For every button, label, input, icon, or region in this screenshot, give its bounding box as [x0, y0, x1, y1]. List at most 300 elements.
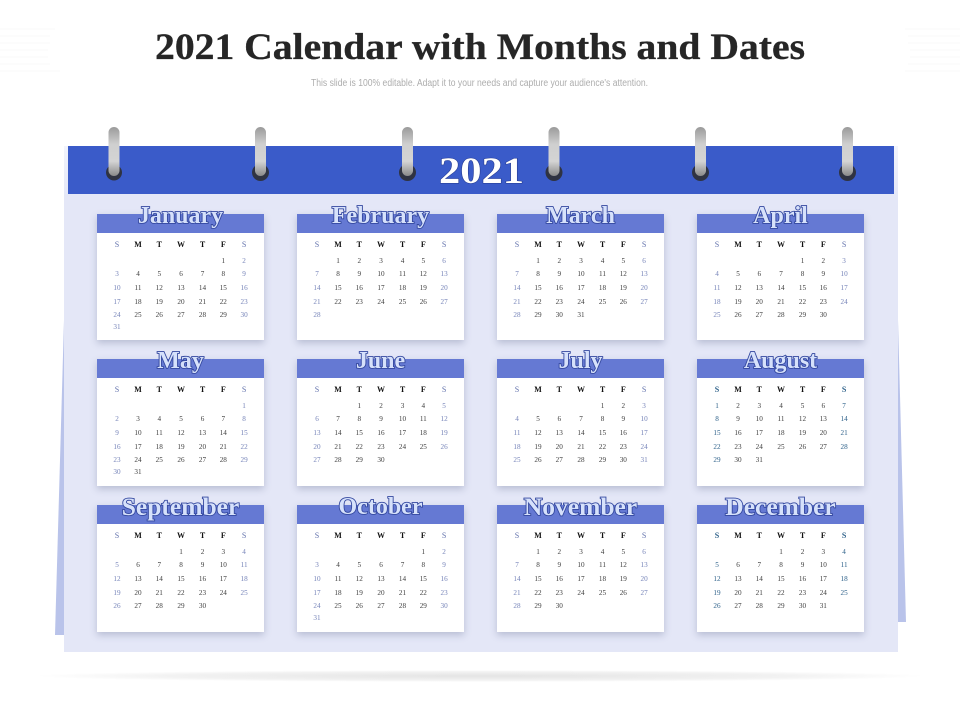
- month card: September: 17: [220, 575, 227, 583]
- month card: February: 5: [422, 257, 425, 265]
- month card: December: W: [777, 531, 785, 540]
- month card: December: 26: [713, 602, 721, 610]
- month card: December: 2: [801, 548, 804, 556]
- month card: April: 5: [736, 270, 740, 278]
- month card: June: 23: [377, 443, 385, 451]
- month card: March: 14: [513, 284, 521, 292]
- month card: July: M: [534, 385, 542, 394]
- month card: May: W: [177, 385, 185, 394]
- month card: March: S: [515, 240, 519, 249]
- month card: September: 16: [199, 575, 206, 583]
- month card: March: 28: [513, 311, 521, 319]
- month card: August: 5: [801, 402, 804, 410]
- month card: June: 16: [377, 429, 385, 437]
- month card: September: 3: [222, 548, 225, 556]
- month card: March: F: [621, 240, 626, 249]
- month card: January: T: [157, 240, 162, 249]
- month card: September: 24: [220, 589, 227, 597]
- month card: September: 13: [134, 575, 142, 583]
- month card: June: 25: [420, 443, 427, 451]
- month card: May: 17: [134, 443, 142, 451]
- month card: June: [297, 359, 464, 486]
- month card: September: 21: [156, 589, 163, 597]
- month card: February: 25: [399, 298, 406, 306]
- month card: March: 6: [642, 257, 646, 265]
- month card: January: 27: [177, 311, 185, 319]
- month card: February: 8: [336, 270, 340, 278]
- month card: February: 20: [440, 284, 448, 292]
- month card: March: S: [642, 240, 646, 249]
- month card: May: 26: [177, 456, 185, 464]
- month card: June: 12: [440, 415, 448, 423]
- month card: May: 13: [199, 429, 206, 437]
- month card: July: 7: [579, 415, 583, 423]
- month card: December: 7: [757, 561, 761, 569]
- month card: February: [297, 214, 464, 340]
- month card: April: 14: [777, 284, 785, 292]
- month card: November: S: [642, 531, 646, 540]
- month card: June: 11: [420, 415, 427, 423]
- month card: March: 25: [599, 298, 606, 306]
- month card: February: 7: [315, 270, 319, 278]
- month card: May: 22: [240, 443, 248, 451]
- month card: June: M: [334, 385, 342, 394]
- month card: October: 29: [420, 602, 427, 610]
- month card: November: M: [534, 531, 542, 540]
- month card: December: 29: [777, 602, 785, 610]
- month card: April: 12: [734, 284, 742, 292]
- month card: November: 27: [640, 589, 648, 597]
- month card: February: 26: [420, 298, 427, 306]
- month card: April: 11: [714, 284, 720, 292]
- month card: January: F: [221, 240, 226, 249]
- month card: April: 9: [822, 270, 825, 278]
- month card: August: S: [715, 385, 719, 394]
- month card: March: 30: [556, 311, 563, 319]
- month card: May: 28: [220, 456, 227, 464]
- month card: December: 4: [842, 548, 846, 556]
- month card: September: 1: [179, 548, 183, 556]
- month card: November: 20: [640, 575, 648, 583]
- month card: September: S: [242, 531, 246, 540]
- month card: December: 25: [840, 589, 848, 597]
- month card: April: 20: [756, 298, 763, 306]
- month card: May: 29: [240, 456, 248, 464]
- month card: August: 10: [756, 415, 763, 423]
- month card: February: 14: [313, 284, 321, 292]
- month card: September: 7: [157, 561, 161, 569]
- month card: October: October: [339, 494, 422, 520]
- month card: February: 21: [313, 298, 321, 306]
- month card: July: 8: [601, 415, 604, 423]
- month card: June: 6: [315, 415, 319, 423]
- month card: October: 1: [422, 548, 425, 556]
- month card: April: April: [753, 203, 808, 229]
- month card: November: 29: [534, 602, 542, 610]
- month card: April: [697, 214, 864, 340]
- month card: July: 2: [622, 402, 625, 410]
- month card: March: 15: [534, 284, 542, 292]
- month card: December: T: [800, 531, 805, 540]
- month card: April: 3: [842, 257, 846, 265]
- month card: May: 1: [242, 402, 246, 410]
- month card: March: 17: [577, 284, 585, 292]
- month card: February: 13: [440, 270, 448, 278]
- month card: November: 24: [577, 589, 585, 597]
- month card: July: 1: [601, 402, 604, 410]
- month card: July: 16: [620, 429, 627, 437]
- month card: December: 6: [736, 561, 740, 569]
- month card: November: 1: [536, 548, 540, 556]
- month card: December: 17: [820, 575, 827, 583]
- month card: July: 9: [622, 415, 625, 423]
- month card: May: 7: [222, 415, 225, 423]
- month card: February: 2: [357, 257, 361, 265]
- month card: December: 14: [756, 575, 763, 583]
- month card: January: 14: [199, 284, 206, 292]
- month card: January: 1: [222, 257, 225, 265]
- month card: September: 11: [241, 561, 248, 569]
- month card: July: 24: [640, 443, 648, 451]
- month card: July: 30: [620, 456, 627, 464]
- month card: February: 16: [356, 284, 363, 292]
- month card: April: 10: [840, 270, 848, 278]
- month card: January: 7: [201, 270, 204, 278]
- month card: February: February: [332, 203, 429, 229]
- month card: October: 21: [399, 589, 406, 597]
- month card: October: M: [334, 531, 342, 540]
- month card: January: S: [115, 240, 119, 249]
- month card: November: 28: [513, 602, 521, 610]
- month card: May: T: [200, 385, 205, 394]
- month card: September: M: [134, 531, 142, 540]
- month card: October: 22: [420, 589, 427, 597]
- month card: April: 6: [757, 270, 761, 278]
- month card: August: 21: [840, 429, 848, 437]
- month card: October: 11: [335, 575, 341, 583]
- month card: August: 20: [820, 429, 827, 437]
- month card: June: 3: [401, 402, 404, 410]
- month card: October: S: [315, 531, 319, 540]
- month card: October: 4: [336, 561, 340, 569]
- month card: September: 6: [136, 561, 140, 569]
- month card: February: 3: [379, 257, 383, 265]
- month card: May: 6: [201, 415, 204, 423]
- month card: March: 27: [640, 298, 648, 306]
- month card: February: S: [315, 240, 319, 249]
- month card: September: 15: [177, 575, 185, 583]
- month card: February: 23: [356, 298, 363, 306]
- month card: June: 4: [422, 402, 425, 410]
- month card: January: 4: [136, 270, 140, 278]
- month card: March: 29: [534, 311, 542, 319]
- month card: March: 18: [599, 284, 606, 292]
- month card: August: 25: [777, 443, 785, 451]
- month card: July: 6: [557, 415, 561, 423]
- month card: May: 2: [115, 415, 119, 423]
- month card: December: 20: [734, 589, 742, 597]
- month card: May: 14: [220, 429, 227, 437]
- month card: January: 15: [220, 284, 227, 292]
- month card: October: 27: [377, 602, 385, 610]
- month card: July: F: [621, 385, 626, 394]
- month card: February: 10: [377, 270, 385, 278]
- month card: June: 17: [399, 429, 406, 437]
- month card: November: 18: [599, 575, 606, 583]
- month card: November: 6: [642, 548, 646, 556]
- month card: April: 18: [713, 298, 721, 306]
- month card: August: M: [734, 385, 742, 394]
- month card: August: 9: [736, 415, 740, 423]
- month card: May: F: [221, 385, 226, 394]
- month card: June: 10: [399, 415, 406, 423]
- month card: March: [497, 214, 664, 340]
- month card: April: 27: [756, 311, 763, 319]
- month card: March: 9: [557, 270, 561, 278]
- month card: March: 12: [620, 270, 627, 278]
- month card: May: 10: [134, 429, 142, 437]
- month card: January: 23: [240, 298, 248, 306]
- month card: October: S: [442, 531, 446, 540]
- month card: January: 18: [134, 298, 142, 306]
- month card: June: 19: [440, 429, 448, 437]
- month card: November: S: [515, 531, 519, 540]
- month card: July: 5: [536, 415, 540, 423]
- month card: November: 21: [513, 589, 521, 597]
- month card: April: T: [800, 240, 805, 249]
- month card: April: W: [777, 240, 785, 249]
- month card: January: 11: [135, 284, 141, 292]
- month card: August: 31: [756, 456, 763, 464]
- month card: September: 2: [201, 548, 204, 556]
- month card: June: S: [442, 385, 446, 394]
- month card: August: 24: [756, 443, 763, 451]
- month card: February: 1: [336, 257, 340, 265]
- month card: August: 29: [713, 456, 721, 464]
- month card: January: 31: [113, 323, 121, 331]
- month card: January: 2: [242, 257, 246, 265]
- month card: November: November: [524, 492, 637, 521]
- month card: April: 15: [799, 284, 806, 292]
- month card: December: T: [757, 531, 762, 540]
- month card: May: S: [242, 385, 246, 394]
- month card: July: 26: [534, 456, 542, 464]
- month card: May: 4: [157, 415, 161, 423]
- month card: June: 2: [379, 402, 383, 410]
- month card: June: 14: [334, 429, 342, 437]
- month card: January: 19: [156, 298, 163, 306]
- month card: August: 3: [757, 402, 761, 410]
- month card: March: 1: [536, 257, 540, 265]
- month card: April: S: [842, 240, 846, 249]
- month card: December: S: [715, 531, 719, 540]
- month card: December: 18: [840, 575, 848, 583]
- month card: January: 24: [113, 311, 121, 319]
- month card: September: S: [115, 531, 119, 540]
- month card: September: 30: [199, 602, 206, 610]
- month card: May: 15: [240, 429, 248, 437]
- month card: October: F: [421, 531, 426, 540]
- month card: November: 22: [534, 589, 542, 597]
- month card: April: 13: [756, 284, 763, 292]
- month card: December: December: [725, 492, 836, 521]
- month card: March: T: [600, 240, 605, 249]
- month card: January: 28: [199, 311, 206, 319]
- month card: February: T: [400, 240, 405, 249]
- month card: June: 13: [313, 429, 321, 437]
- month card: May: 27: [199, 456, 206, 464]
- month card: June: 9: [379, 415, 383, 423]
- month card: July: T: [600, 385, 605, 394]
- month card: February: 12: [420, 270, 427, 278]
- month card: June: 29: [356, 456, 363, 464]
- month card: October: 30: [440, 602, 448, 610]
- month card: August: 7: [842, 402, 846, 410]
- month card: November: 8: [536, 561, 540, 569]
- month card: March: 3: [579, 257, 583, 265]
- month card: April: 1: [801, 257, 804, 265]
- month card: November: T: [600, 531, 605, 540]
- month card: November: 9: [557, 561, 561, 569]
- month card: December: 8: [779, 561, 783, 569]
- month card: February: 15: [334, 284, 342, 292]
- month card: September: 28: [156, 602, 163, 610]
- month card: November: 23: [556, 589, 563, 597]
- month card: June: 21: [334, 443, 342, 451]
- month card: June: 18: [420, 429, 427, 437]
- month card: November: 5: [622, 548, 625, 556]
- month card: July: W: [577, 385, 585, 394]
- month card: November: T: [557, 531, 562, 540]
- month card: October: W: [377, 531, 385, 540]
- month card: March: 7: [515, 270, 519, 278]
- month card: April: 17: [840, 284, 848, 292]
- month card: April: M: [734, 240, 742, 249]
- month card: July: 31: [640, 456, 648, 464]
- month card: March: 24: [577, 298, 585, 306]
- month card: February: 24: [377, 298, 385, 306]
- month card: May: 21: [220, 443, 227, 451]
- month card: December: 23: [799, 589, 806, 597]
- month card: June: 7: [336, 415, 340, 423]
- month card: June: W: [377, 385, 385, 394]
- month card: September: W: [177, 531, 185, 540]
- month card: October: 8: [422, 561, 425, 569]
- month card: December: 19: [713, 589, 721, 597]
- month card: January: 21: [199, 298, 206, 306]
- month card: June: 28: [334, 456, 342, 464]
- month card: August: 4: [779, 402, 783, 410]
- month card: March: 2: [557, 257, 561, 265]
- month card: April: S: [715, 240, 719, 249]
- month card: June: 30: [377, 456, 385, 464]
- month card: May: 8: [242, 415, 246, 423]
- month card: February: 17: [377, 284, 385, 292]
- month card: September: September: [122, 492, 239, 521]
- month card: November: F: [621, 531, 626, 540]
- month card: August: F: [821, 385, 826, 394]
- month card: March: 8: [536, 270, 540, 278]
- month card: March: 26: [620, 298, 627, 306]
- month card: March: March: [546, 203, 615, 229]
- month card: August: 1: [715, 402, 719, 410]
- month card: June: June: [356, 348, 405, 374]
- month card: July: 25: [513, 456, 521, 464]
- month card: May: 24: [134, 456, 142, 464]
- month card: April: 4: [715, 270, 719, 278]
- month card: August: 17: [756, 429, 763, 437]
- month card: December: 11: [841, 561, 848, 569]
- month card: November: 19: [620, 575, 627, 583]
- month card: August: 12: [799, 415, 806, 423]
- month card: May: 23: [113, 456, 121, 464]
- month card: May: [97, 359, 264, 486]
- month card: December: 1: [779, 548, 783, 556]
- month card: August: 15: [713, 429, 721, 437]
- month card: March: 13: [640, 270, 648, 278]
- month card: January: 16: [240, 284, 248, 292]
- month card: January: 5: [157, 270, 161, 278]
- month card: April: 24: [840, 298, 848, 306]
- month card: February: 6: [442, 257, 446, 265]
- month card: September: 8: [179, 561, 183, 569]
- month card: November: 3: [579, 548, 583, 556]
- month card: October: 17: [313, 589, 321, 597]
- month card: May: 19: [177, 443, 185, 451]
- month card: August: 23: [734, 443, 742, 451]
- month card: June: F: [421, 385, 426, 394]
- month card: March: 10: [577, 270, 585, 278]
- month card: October: 13: [377, 575, 385, 583]
- month card: November: 13: [640, 561, 648, 569]
- month card: April: 19: [734, 298, 742, 306]
- month card: November: 30: [556, 602, 563, 610]
- month card: February: 28: [313, 311, 321, 319]
- month card: January: S: [242, 240, 246, 249]
- month card: April: 23: [820, 298, 827, 306]
- month card: December: 15: [777, 575, 785, 583]
- month card: October: 24: [313, 602, 321, 610]
- month card: September: 19: [113, 589, 121, 597]
- month card: December: 28: [756, 602, 763, 610]
- month card: October: 16: [440, 575, 448, 583]
- month card: March: 16: [556, 284, 563, 292]
- month card: February: 9: [357, 270, 361, 278]
- month card: March: 21: [513, 298, 521, 306]
- month card: October: 23: [440, 589, 448, 597]
- month card: June: 5: [442, 402, 446, 410]
- month card: January: M: [134, 240, 142, 249]
- month card: March: 5: [622, 257, 625, 265]
- month card: July: 11: [514, 429, 520, 437]
- month card: January: 26: [156, 311, 163, 319]
- month card: August: 2: [736, 402, 740, 410]
- month card: July: 12: [534, 429, 542, 437]
- month card: December: M: [734, 531, 742, 540]
- year label: 2021: [439, 151, 524, 192]
- month card: November: [497, 505, 664, 632]
- month card: March: M: [534, 240, 542, 249]
- month card: March: 11: [599, 270, 606, 278]
- month card: August: T: [800, 385, 805, 394]
- month card: September: 18: [240, 575, 248, 583]
- month card: September: 29: [177, 602, 185, 610]
- month card: January: 17: [113, 298, 121, 306]
- month card: April: 25: [713, 311, 721, 319]
- month card: January: [97, 214, 264, 340]
- month card: November: 2: [557, 548, 561, 556]
- month card: November: 26: [620, 589, 627, 597]
